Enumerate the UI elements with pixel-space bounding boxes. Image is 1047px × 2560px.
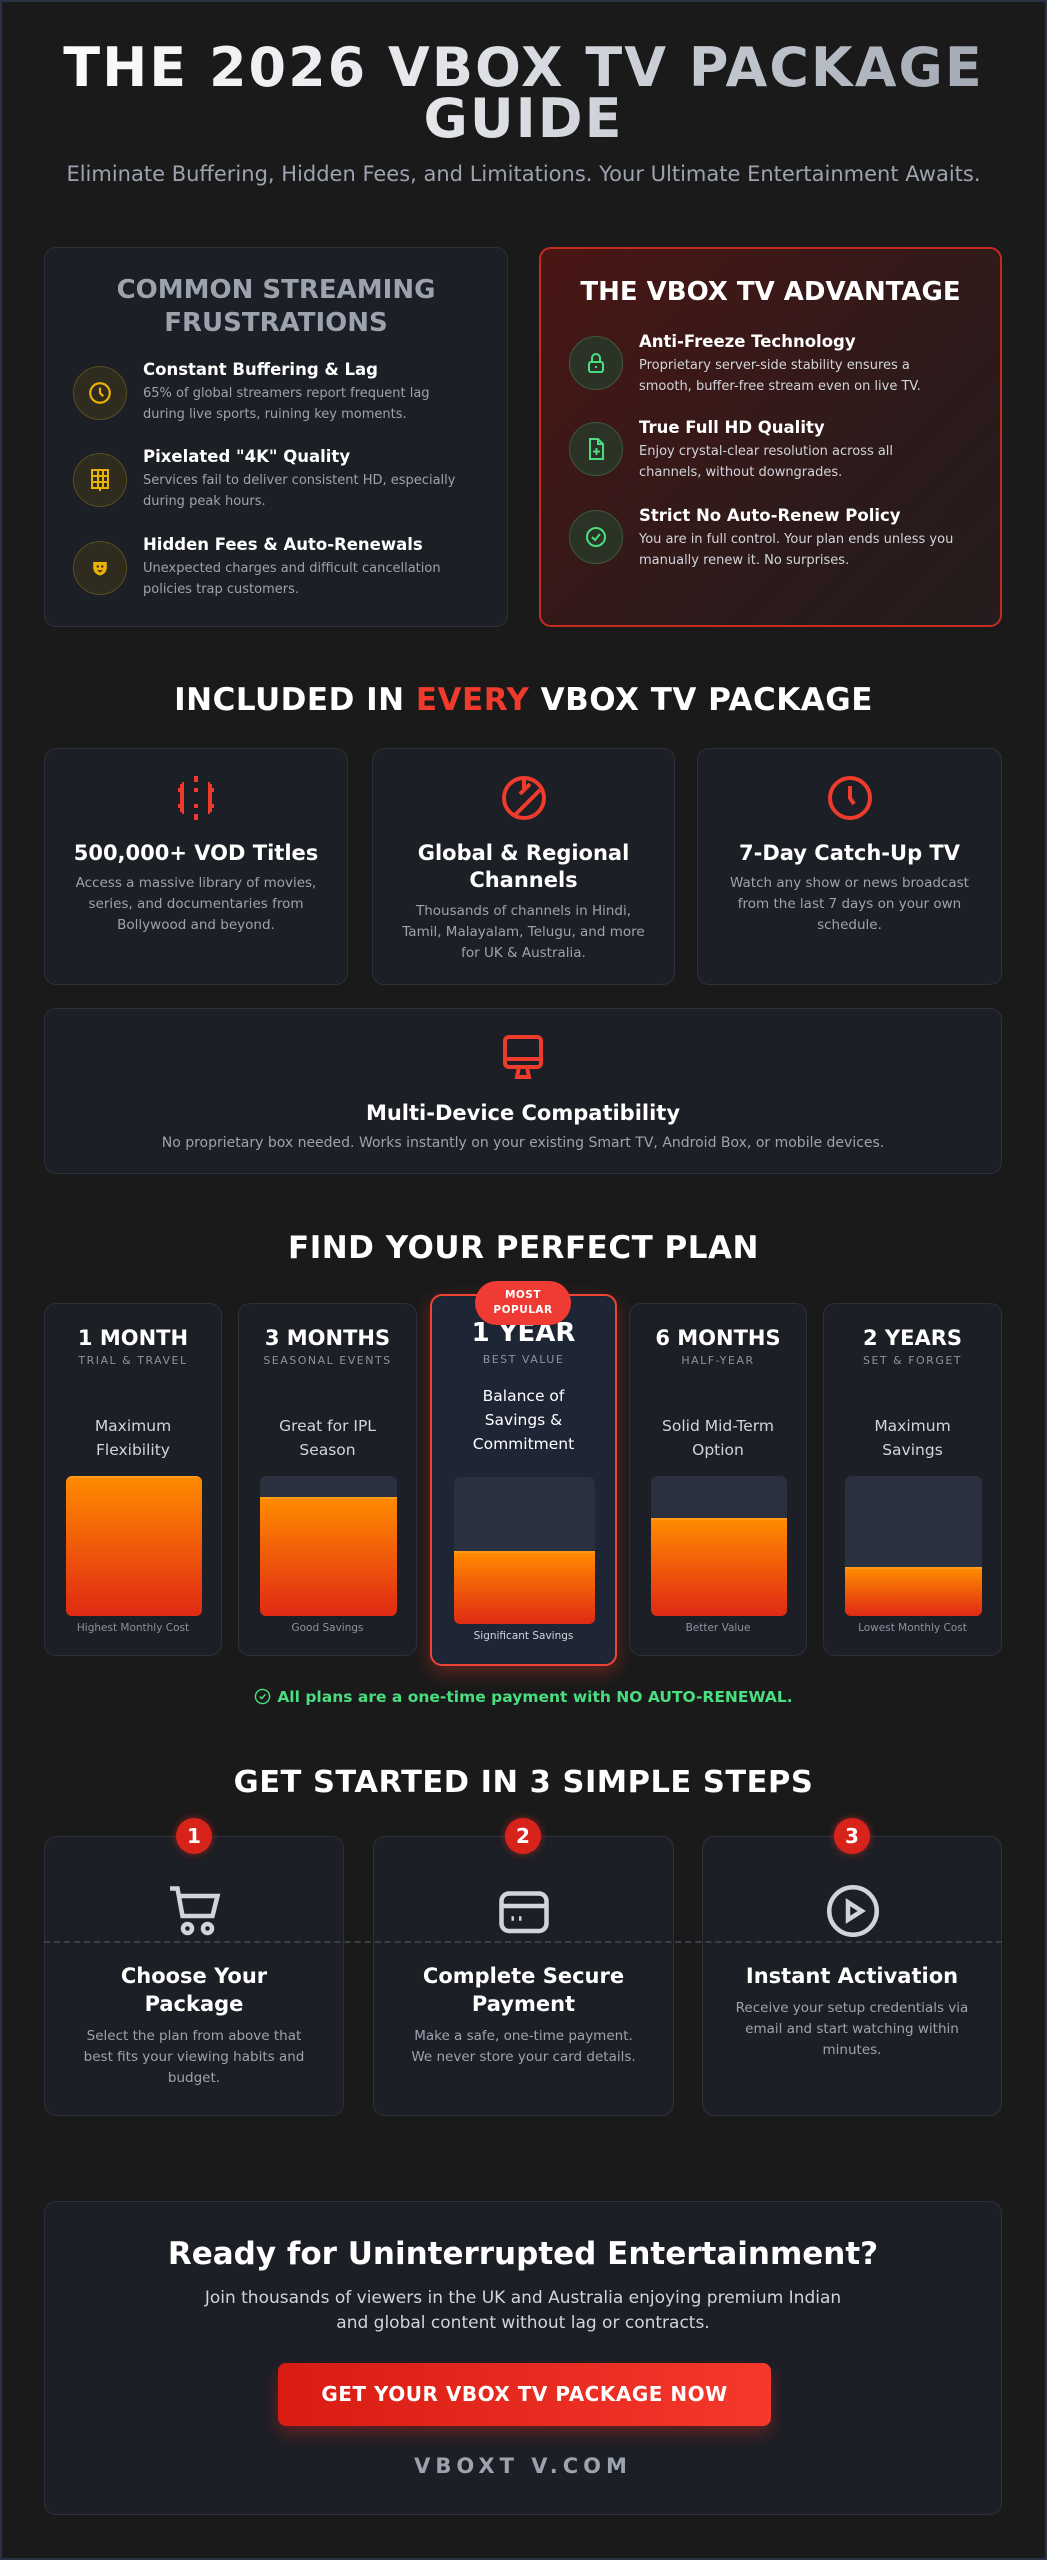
heading: plans: FIND YOUR PERFECT PLAN: [288, 1230, 759, 1266]
badge: step 3: [834, 1818, 870, 1854]
plan: 2 years: Savings: [882, 1441, 943, 1459]
step 1: Select the plan from above that best fits your viewing habits and budget.: [84, 2028, 304, 2086]
plan: 3 months: 3 MONTHS: [265, 1326, 390, 1350]
plan: 2 years: SET & FORGET: [863, 1354, 962, 1367]
plan: 2 years: Maximum: [874, 1417, 951, 1435]
card: channels: Channels: [469, 868, 578, 892]
icon: card: [499, 1891, 549, 1934]
plan: 1 month: Flexibility: [96, 1441, 170, 1459]
card: multi-device: Multi-Device Compatibility: [366, 1101, 680, 1125]
card: channels: Thousands of channels in Hindi, Tamil, Malayalam, Telugu, and more for UK & Australia.: [402, 903, 645, 961]
item: full HD: True Full HD Quality: [639, 418, 825, 437]
plan: 3 months: Good Savings: [291, 1622, 364, 1634]
card: multi-device: [44, 1008, 1002, 1174]
step 1: Package: [145, 1992, 243, 2016]
item: pixelated: [73, 447, 455, 509]
badge: most popular: MOST: [505, 1289, 541, 1301]
icon: globe: [502, 776, 546, 820]
icon: clock: [73, 366, 127, 420]
plan: 6 months: 6 MONTHS: [655, 1326, 781, 1350]
badge: most popular: POPULAR: [493, 1304, 553, 1316]
card: catch-up: [697, 748, 1002, 985]
card: multi-device: No proprietary box needed. Works instantly on your existing Smart TV, Android Box, or mobile devices.: [162, 1135, 884, 1151]
note: no auto-renewal: All plans are a one-time payment with NO AUTO-RENEWAL.: [277, 1688, 793, 1706]
item: buffering: [73, 360, 430, 422]
badge: step 2: 2: [516, 1824, 530, 1848]
cta text: Join thousands of viewers in the UK and Australia enjoying premium Indian: [205, 2288, 841, 2308]
bar chart: 1 month: [66, 1476, 202, 1616]
plan: 6 months: Better Value: [686, 1622, 750, 1634]
step 2: [373, 1836, 674, 2116]
plan: 1 month: TRIAL & TRAVEL: [78, 1354, 188, 1367]
heading: advantage: THE VBOX TV ADVANTAGE: [580, 277, 961, 307]
plan: 1 month: 1 MONTH: [78, 1326, 188, 1350]
step 3: Instant Activation: [746, 1964, 958, 1988]
badge: step 1: [176, 1818, 212, 1854]
plan: 2 years: [823, 1303, 1002, 1656]
card: channels: Global & Regional: [418, 841, 629, 865]
step 2: Complete Secure: [423, 1964, 624, 1988]
icon: lock: [569, 336, 623, 390]
site url: VBOXT V.COM: [414, 2454, 632, 2478]
badge: step 3: 3: [845, 1824, 859, 1848]
plan: 1 year: Balance of: [483, 1387, 564, 1405]
plan: 6 months: HALF-YEAR: [681, 1354, 755, 1367]
card: VOD: 500,000+ VOD Titles: [74, 841, 318, 865]
heading: included: INCLUDED IN EVERY VBOX TV PACKAGE: [174, 682, 873, 718]
title: [0, 42, 1047, 144]
step 3: [702, 1836, 1002, 2116]
bar chart: 6 months: [651, 1476, 787, 1616]
plan: 2 years: Lowest Monthly Cost: [858, 1622, 967, 1634]
icon: check: [569, 510, 623, 564]
plan: 6 months: [629, 1303, 807, 1656]
icon: mask: [73, 541, 127, 595]
panel: frustrations: [44, 247, 508, 627]
step 2: Payment: [472, 1992, 575, 2016]
item: buffering: 65% of global streamers report frequent lag during live sports, ruining key moments.: [143, 386, 430, 422]
panel: advantage: [539, 247, 1002, 627]
plan: 6 months: Solid Mid-Term: [662, 1417, 774, 1435]
item: hidden fees: Hidden Fees & Auto-Renewals: [143, 535, 423, 554]
item: full HD: Enjoy crystal-clear resolution across all channels, without downgrades.: [639, 444, 893, 480]
plan: 3 months: Season: [299, 1441, 356, 1459]
item: no auto-renew: You are in full control. Your plan ends unless you manually renew it. No surprises.: [639, 532, 953, 568]
plan: 3 months: Great for IPL: [279, 1417, 376, 1435]
item: pixelated: Pixelated "4K" Quality: [143, 447, 350, 466]
heading: frustrations: [117, 275, 435, 338]
cta heading: Ready for Uninterrupted Entertainment?: [168, 2236, 878, 2272]
plan: 1 year: Savings &: [485, 1411, 562, 1429]
badge: most popular: [475, 1281, 571, 1325]
plan: 1 year: 1 YEAR: [472, 1318, 575, 1348]
step 1: Choose Your: [121, 1964, 267, 1988]
item: hidden fees: Unexpected charges and difficult cancellation policies trap customers.: [143, 561, 441, 597]
icon: file: [569, 422, 623, 476]
item: full HD: [569, 418, 893, 480]
bar chart: 3 months: [260, 1476, 397, 1616]
card: catch-up: Watch any show or news broadcast from the last 7 days on your own schedule.: [730, 875, 969, 933]
icon: clock: [828, 776, 872, 820]
plan: 1 year: BEST VALUE: [483, 1353, 564, 1366]
plan: 1 year: [430, 1294, 617, 1666]
icon: grid: [73, 453, 127, 507]
button: [278, 2363, 771, 2426]
icon: film: [178, 776, 214, 820]
card: VOD: [44, 748, 348, 985]
card: catch-up: 7-Day Catch-Up TV: [739, 841, 960, 865]
title: GUIDE: [424, 87, 623, 150]
step 2: Make a safe, one-time payment. We never store your card details.: [411, 2028, 636, 2065]
plan: 1 month: [44, 1303, 222, 1656]
cta text: and global content without lag or contracts.: [336, 2313, 710, 2333]
icon: play: [827, 1885, 879, 1937]
item: hidden fees: [73, 535, 441, 597]
badge: step 2: [505, 1818, 541, 1854]
heading: steps: GET STARTED IN 3 SIMPLE STEPS: [234, 1765, 813, 1800]
cta text: [204, 2288, 841, 2333]
plan: 1 year: Commitment: [473, 1435, 574, 1453]
heading: frustrations: COMMON STREAMING: [117, 275, 435, 305]
bar chart: 2 years: [845, 1476, 982, 1616]
plan: 1 year: Significant Savings: [474, 1630, 573, 1642]
item: pixelated: Services fail to deliver consistent HD, especially during peak hours.: [143, 473, 455, 509]
icon: cart: [170, 1886, 220, 1936]
bar chart: 1 year: [454, 1477, 595, 1624]
step 1: [44, 1836, 344, 2116]
title: THE 2026 VBOX TV PACKAGE: [63, 36, 984, 99]
item: no auto-renew: [569, 506, 953, 568]
item: no auto-renew: Strict No Auto-Renew Policy: [639, 506, 901, 525]
heading: frustrations: FRUSTRATIONS: [164, 308, 388, 338]
plan: 2 years: 2 YEARS: [863, 1326, 962, 1350]
icon: monitor: [503, 1035, 543, 1079]
plan: 3 months: [238, 1303, 417, 1656]
item: anti-freeze: Proprietary server-side stability ensures a smooth, buffer-free stream even on live TV.: [639, 358, 921, 394]
badge: step 1: 1: [187, 1824, 201, 1848]
button: GET YOUR VBOX TV PACKAGE NOW: [321, 2382, 728, 2406]
card: VOD: Access a massive library of movies, series, and documentaries from Bollywood and beyond.: [76, 875, 316, 933]
step 3: Receive your setup credentials via email and start watching within minutes.: [736, 2000, 968, 2058]
plan: 1 month: Maximum: [95, 1417, 171, 1435]
plan: 3 months: SEASONAL EVENTS: [263, 1354, 392, 1367]
item: anti-freeze: Anti-Freeze Technology: [639, 332, 856, 351]
plan: 6 months: Option: [692, 1441, 744, 1459]
plan: 1 month: Highest Monthly Cost: [77, 1622, 189, 1634]
item: anti-freeze: [569, 332, 921, 394]
item: buffering: Constant Buffering & Lag: [143, 360, 378, 379]
card: channels: [372, 748, 675, 985]
subtitle: Eliminate Buffering, Hidden Fees, and Limitations. Your Ultimate Entertainment Awaits.: [66, 162, 981, 186]
panel: call to action: [44, 2201, 1002, 2515]
